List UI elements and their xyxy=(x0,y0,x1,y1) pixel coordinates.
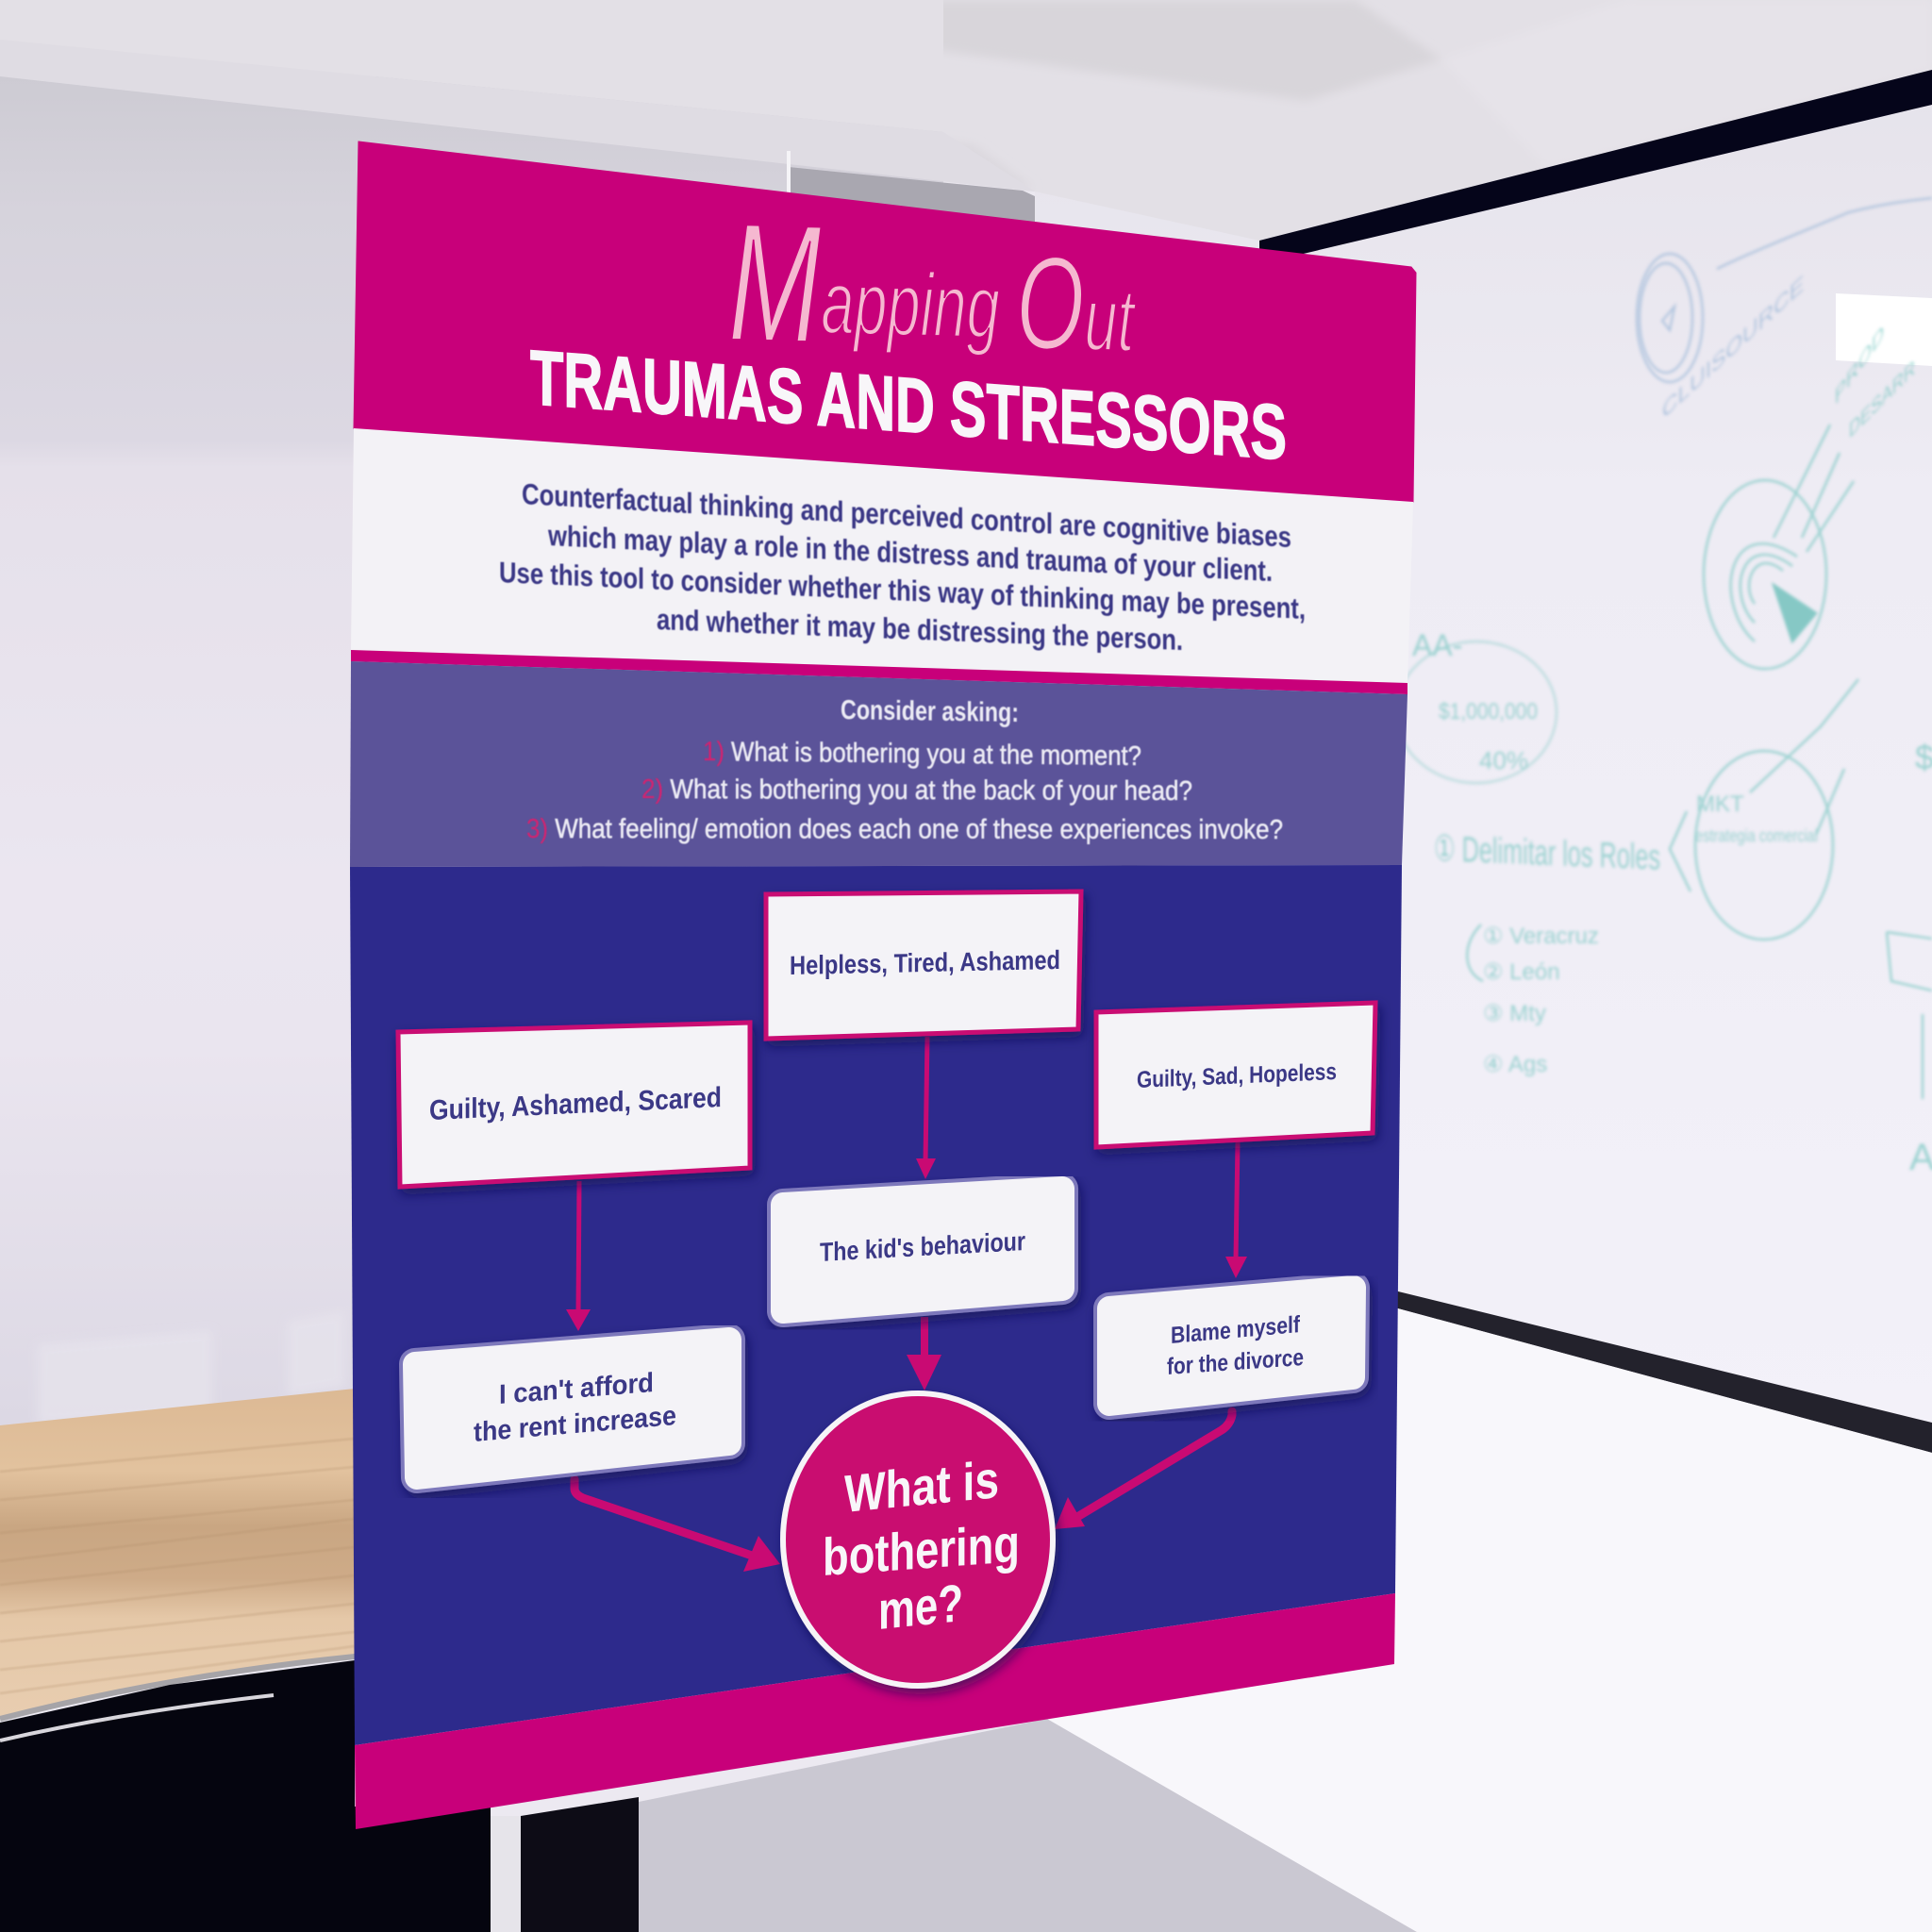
ceiling xyxy=(0,0,1932,241)
handwriting: percent: 40% xyxy=(1479,746,1528,774)
intro line 4: and whether it may be distressing the person. xyxy=(657,603,1183,657)
title: Traumas and Stressors: TRAUMAS AND STRESSORS xyxy=(530,335,1287,476)
handwriting: MKT: MKT xyxy=(1696,791,1744,817)
diagram: money circle xyxy=(1396,641,1557,783)
whiteboard scribbles xyxy=(1396,198,1932,1178)
back wall grey band xyxy=(789,167,1035,274)
arrow: left feeling to event xyxy=(566,1181,591,1331)
handwriting: money: $1,000,000 xyxy=(1439,699,1538,724)
label line 1: I can't afford xyxy=(499,1368,654,1410)
handwriting: list 4: ④ Ags xyxy=(1483,1052,1547,1077)
ceiling panels xyxy=(0,0,1932,189)
handwriting: list 3: ③ Mty xyxy=(1483,1001,1546,1026)
reflection: right xyxy=(288,1311,344,1396)
right box sketch xyxy=(1887,932,1932,1099)
label line 2: the rent increase xyxy=(474,1401,676,1448)
whiteboard text xyxy=(1412,270,1932,1178)
box: The kid's behaviour xyxy=(783,1189,1062,1311)
panel: soffit shadow xyxy=(0,41,1035,189)
wood grain xyxy=(0,1439,355,1693)
band: magenta footer xyxy=(355,1593,1395,1829)
chair reflection xyxy=(0,1695,274,1740)
wood table xyxy=(0,1389,355,1717)
band: pink stripe xyxy=(351,650,1407,694)
title: Mapping Out: O xyxy=(1016,228,1084,378)
handwriting: clusource: CLUISOURCE xyxy=(1662,270,1804,425)
box: I can't afford the rent increase xyxy=(415,1340,729,1477)
left wall xyxy=(0,76,943,1425)
table leg xyxy=(521,1797,639,1932)
band: white intro xyxy=(351,428,1413,683)
intro text xyxy=(499,477,1306,657)
whiteboard top frame line xyxy=(1259,70,1932,264)
handwriting: prod: PROD xyxy=(1835,318,1884,410)
arrow: centre event to question xyxy=(907,1317,941,1391)
intro line 1: Counterfactual thinking and perceived control are cognitive biases xyxy=(522,477,1291,554)
title: Mapping Out: M xyxy=(728,188,822,378)
label: Guilty, Ashamed, Scared xyxy=(429,1082,722,1126)
panel: centre dark ceiling tile xyxy=(591,0,1441,101)
label: Helpless, Tired, Ashamed xyxy=(790,945,1060,980)
floor xyxy=(639,1719,1417,1932)
band: purple questions xyxy=(350,661,1407,867)
questions heading: Consider asking: xyxy=(841,695,1019,728)
table fabric edge xyxy=(0,1657,355,1719)
reflection: left xyxy=(38,1330,212,1424)
arrow: centre feeling to event xyxy=(916,1037,936,1179)
intro line 3: Use this tool to consider whether this way of thinking may be present, xyxy=(499,556,1306,625)
right wall and whiteboard base xyxy=(1035,0,1932,1434)
circle line 2: bothering xyxy=(823,1513,1020,1587)
box: Guilty, Sad, Hopeless xyxy=(1096,1003,1375,1147)
wall reflection panels xyxy=(38,1311,344,1424)
centre circle: What is bothering me? xyxy=(783,1393,1053,1686)
arrow: left event to question xyxy=(575,1479,780,1572)
dark chair xyxy=(0,1660,491,1932)
handwriting: Delimitar los roles: ① Delimitar los Roles xyxy=(1434,829,1660,878)
intro line 2: which may play a role in the distress and trauma of your client. xyxy=(547,519,1273,588)
title: Mapping Out: ut xyxy=(1084,270,1159,372)
box: Blame myself for the divorce xyxy=(1109,1288,1354,1404)
diagram: circle A xyxy=(1637,198,1932,382)
label: Guilty, Sad, Hopeless xyxy=(1137,1058,1337,1093)
band: navy flowchart xyxy=(350,865,1402,1745)
white strip between legs xyxy=(491,1816,521,1932)
box: Guilty, Ashamed, Scared xyxy=(398,1023,750,1187)
whiteboard bottom frame line xyxy=(1394,1291,1932,1453)
arrow: right feeling to event xyxy=(1225,1142,1247,1278)
glare patch xyxy=(1836,293,1932,366)
panel: right tile xyxy=(1441,0,1932,168)
handwriting: list: ① Veracruz xyxy=(1483,924,1599,949)
handwriting: AA: AA- xyxy=(1412,628,1462,662)
label: The kid's behaviour xyxy=(820,1226,1025,1267)
poster xyxy=(350,142,1416,1829)
questions xyxy=(526,695,1283,845)
circle line 3: me? xyxy=(878,1573,963,1641)
question 3: 3) What feeling/ emotion does each one of these experiences invoke? xyxy=(526,814,1283,845)
circle line 1: What is xyxy=(844,1449,999,1524)
arrow: right event to question xyxy=(1055,1411,1232,1529)
box: Helpless, Tired, Ashamed xyxy=(766,891,1081,1039)
flowchart xyxy=(398,891,1375,1686)
handwriting: list 2: ② León xyxy=(1483,959,1560,985)
diagram: MKT circle xyxy=(1670,679,1858,940)
handwriting: strategy: estrategia comercial xyxy=(1695,826,1818,845)
question 1: 1) What is bothering you at the moment? xyxy=(703,737,1141,772)
title: Mapping Out: apping xyxy=(821,253,1016,358)
question 2: 2) What is bothering you at the back of your head? xyxy=(641,774,1192,807)
label line 1: Blame myself xyxy=(1171,1311,1301,1349)
lower white wall xyxy=(1047,1307,1932,1932)
hanging wire xyxy=(787,151,791,193)
band: magenta header xyxy=(354,142,1416,502)
list bracket xyxy=(1467,924,1483,981)
diagram: concentric target xyxy=(1704,425,1854,669)
label line 2: for the divorce xyxy=(1167,1344,1304,1380)
